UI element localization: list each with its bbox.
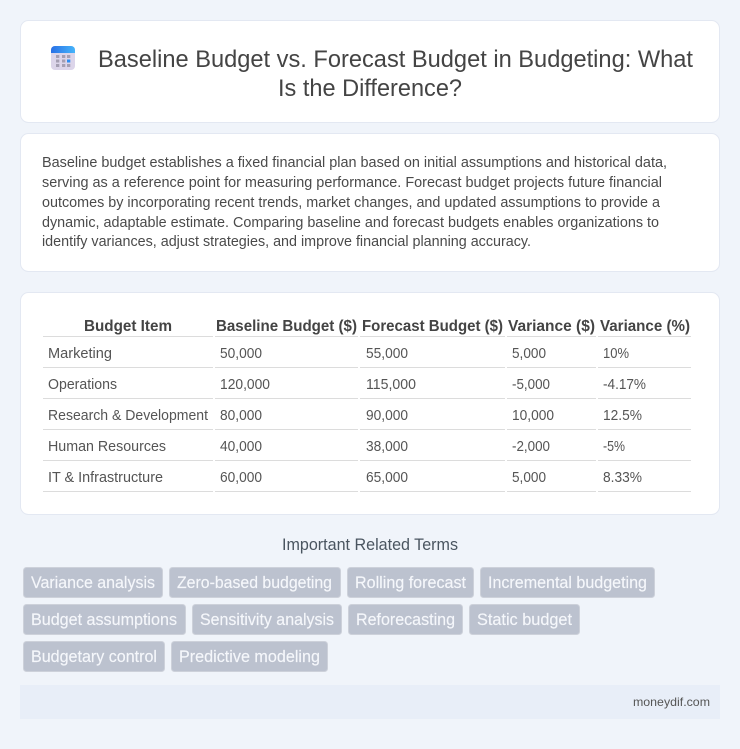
row: Human Resources: 38,000 <box>366 439 408 455</box>
tag: Zero-based budgeting: Zero-based budgeting <box>177 574 332 592</box>
tag: Reforecasting <box>348 604 462 634</box>
row: Research & Development: 10,000 <box>512 408 554 424</box>
tag: Variance analysis <box>24 568 162 598</box>
tag: Variance analysis: Variance analysis <box>31 574 155 592</box>
title text: Is the Difference? <box>278 75 462 102</box>
tag: Budget assumptions: Budget assumptions <box>31 611 177 629</box>
tag: Predictive modeling: Predictive modeling <box>179 648 320 666</box>
tag: Rolling forecast <box>348 568 474 598</box>
summary text: serving as a reference point for measuring performance. Forecast budget projects future financial <box>42 175 662 191</box>
row: IT & Infrastructure: 5,000 <box>512 470 546 486</box>
tag: Sensitivity analysis: Sensitivity analysis <box>200 611 334 629</box>
row: Research & Development: Research & Development <box>48 408 208 424</box>
summary text <box>42 155 667 250</box>
summary text: identify variances, adjust strategies, and improve financial planning accuracy. <box>42 234 531 250</box>
tag: Budgetary control: Budgetary control <box>31 648 157 666</box>
row: IT & Infrastructure: 8.33% <box>603 470 642 486</box>
footer <box>20 685 720 719</box>
tag: Zero-based budgeting <box>170 568 340 598</box>
row: Research & Development: 90,000 <box>366 408 408 424</box>
row: Marketing: Marketing <box>48 346 112 362</box>
row: Operations: 115,000 <box>366 377 416 393</box>
row: Research & Development: 80,000 <box>220 408 262 424</box>
panel: title <box>20 20 720 122</box>
row: Marketing: 55,000 <box>366 346 408 362</box>
title text <box>98 46 693 102</box>
tag: Incremental budgeting: Incremental budgeting <box>488 574 647 592</box>
row: Marketing: 10% <box>603 346 629 362</box>
heading: related terms: Important Related Terms <box>282 536 458 554</box>
table header: Forecast Budget ($) <box>362 318 503 335</box>
table header: Baseline Budget ($) <box>216 318 357 335</box>
tag: Static budget <box>470 604 580 634</box>
row: Research & Development: 12.5% <box>603 408 642 424</box>
related term tags <box>24 568 654 672</box>
row: Operations: 120,000 <box>220 377 270 393</box>
panel: summary <box>20 134 720 272</box>
row: IT & Infrastructure: 65,000 <box>366 470 408 486</box>
row: IT & Infrastructure: 60,000 <box>220 470 262 486</box>
row: Human Resources: 40,000 <box>220 439 262 455</box>
row: Marketing: 50,000 <box>220 346 262 362</box>
row: IT & Infrastructure <box>48 470 642 486</box>
tag: Reforecasting: Reforecasting <box>356 611 455 629</box>
summary text: Baseline budget establishes a fixed financial plan based on initial assumptions and historical data, <box>42 155 667 171</box>
footer site name: moneydif.com <box>633 695 710 709</box>
row: Operations <box>48 377 646 393</box>
tag: Budgetary control <box>24 642 164 672</box>
tag: Predictive modeling <box>172 642 328 672</box>
title text: Baseline Budget vs. Forecast Budget in Budgeting: What <box>98 46 693 73</box>
row: Human Resources: -5% <box>603 439 625 455</box>
row: Marketing: 5,000 <box>512 346 546 362</box>
summary text: dynamic, adaptable estimate. Comparing baseline and forecast budgets enables organizations to <box>42 215 659 231</box>
table header: Variance (%) <box>600 318 690 335</box>
table header: Budget Item <box>84 318 172 335</box>
row: Operations: Operations <box>48 377 117 393</box>
tag: Incremental budgeting <box>480 568 654 598</box>
row: Human Resources: -2,000 <box>512 439 550 455</box>
tag: Sensitivity analysis <box>192 604 342 634</box>
summary text: outcomes by incorporating recent trends, market changes, and updated assumptions to provide a <box>42 195 660 211</box>
tag: Static budget: Static budget <box>477 611 572 629</box>
row: Marketing <box>48 346 629 362</box>
panel: budget table <box>20 292 720 514</box>
row: IT & Infrastructure: IT & Infrastructure <box>48 470 163 486</box>
tag: Budget assumptions <box>24 604 186 634</box>
table header <box>84 318 690 335</box>
row: Research & Development <box>48 408 642 424</box>
table header: Variance ($) <box>508 318 595 335</box>
row: Operations: -4.17% <box>603 377 646 393</box>
tag: Rolling forecast: Rolling forecast <box>355 574 466 592</box>
row: Human Resources <box>48 439 625 455</box>
row: Human Resources: Human Resources <box>48 439 166 455</box>
icon: calendar <box>51 46 75 70</box>
row: Operations: -5,000 <box>512 377 550 393</box>
